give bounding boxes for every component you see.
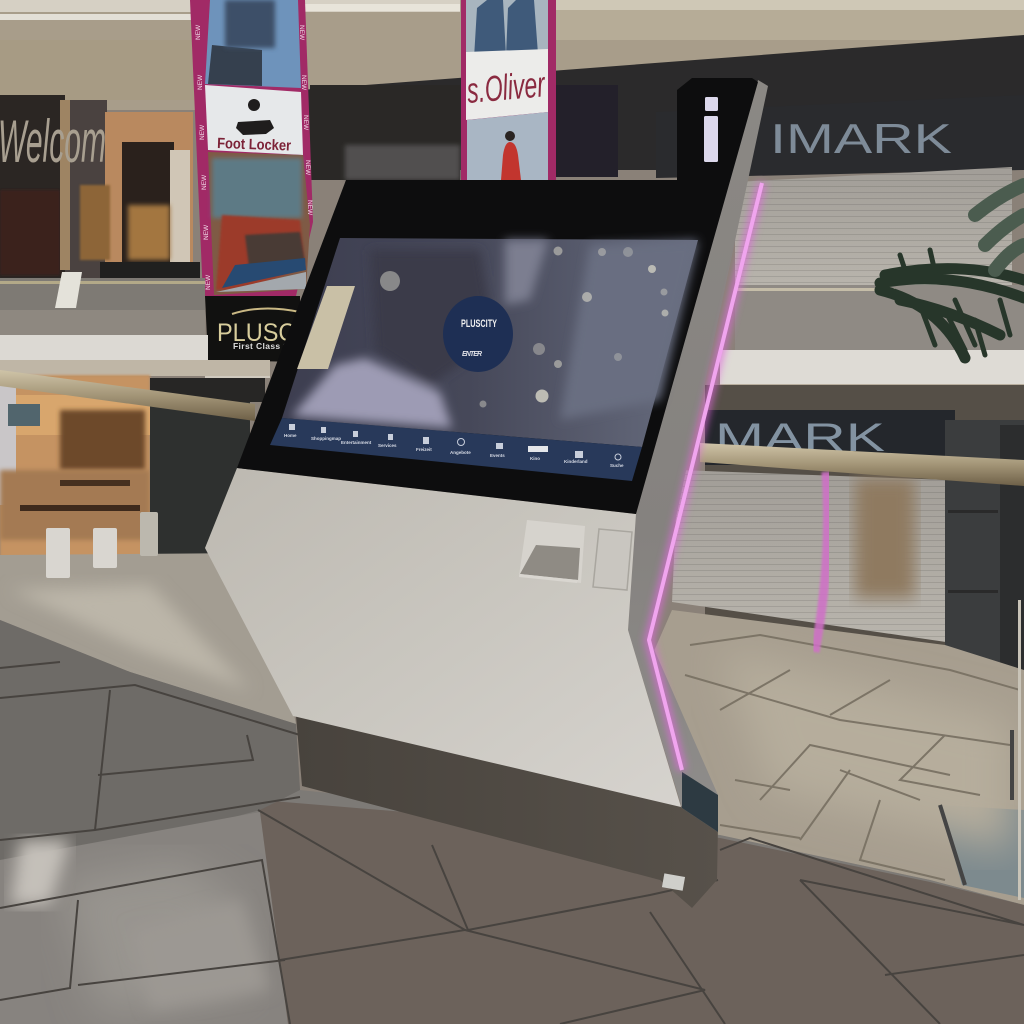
repeated NEW strip labels (195, 24, 313, 290)
repeated NEW strip labels: NEW (195, 24, 202, 40)
cafe planters (46, 512, 158, 578)
icon: referee figure (236, 99, 274, 135)
plant (880, 185, 1024, 358)
touch screen (270, 238, 698, 481)
sign: Primark upper: IMARK (770, 115, 952, 162)
kiosk black bezel and head (237, 78, 758, 514)
label plate on base (662, 873, 685, 891)
upper level right: PRIMARK store (656, 95, 1024, 351)
kiosk side panel (628, 80, 768, 832)
reflection: pink light on glass (815, 472, 828, 652)
repeated NEW strip labels: NEW (201, 174, 208, 190)
screen bokeh dots (380, 246, 668, 408)
pink LED strip (649, 183, 762, 770)
kiosk (205, 78, 768, 908)
label: enter: ENTER (462, 351, 482, 358)
floor inside glass left (0, 553, 296, 724)
repeated NEW strip labels: NEW (300, 75, 307, 91)
nav items: Suche (610, 463, 624, 468)
repeated NEW strip labels: NEW (302, 115, 309, 131)
promotional side card (297, 286, 355, 369)
navigation bar (270, 418, 642, 481)
upper walkway and white balustrades (0, 272, 1024, 414)
logo: PlusCity: PLUSCITY (461, 318, 497, 330)
granite floor left and right (0, 620, 1024, 1024)
card reader outline (593, 529, 632, 590)
upper level storefront: Welcome shop (0, 95, 200, 312)
nav items: Angebote (450, 450, 471, 455)
banner footer: PlusCity logo: PLUSCITY (217, 319, 332, 347)
upper level storefront: Welcome shop: Welcom (0, 108, 106, 175)
banner: Foot Locker (190, 0, 313, 296)
enter button with logo (443, 296, 513, 372)
kiosk front face (205, 468, 681, 807)
kiosk sign: small stand (55, 272, 82, 308)
info icon: illuminated i (704, 97, 718, 162)
nav items: Events (490, 453, 505, 458)
kiosk base (296, 716, 718, 908)
nav items: Shoppingmap (311, 436, 341, 441)
lower level right: PRIMARK store with shutter (672, 385, 1024, 670)
repeated NEW strip labels: NEW (298, 25, 305, 41)
lower level left: cafe (0, 375, 296, 724)
repeated NEW strip labels: NEW (203, 224, 210, 240)
handrails (0, 370, 1024, 486)
repeated NEW strip labels: NEW (197, 74, 204, 90)
nav items: Freizeit (416, 447, 432, 452)
card slot scanner (519, 520, 585, 583)
nav items: Services (378, 443, 397, 448)
banner footer: PlusCity logo: First Class Shopping (233, 341, 325, 351)
nav items (284, 433, 624, 468)
nav items: Kinderland (564, 459, 588, 464)
nav items: Entertainment (341, 440, 372, 445)
nav items: Kino (530, 456, 540, 461)
banner: s.Oliver (461, 0, 556, 180)
brand name: Foot Locker: Foot Locker (217, 135, 292, 155)
repeated NEW strip labels: NEW (199, 124, 206, 140)
brand name: s.Oliver: s.Oliver (465, 63, 548, 111)
tiled floor behind glass right (650, 472, 1024, 905)
repeated NEW strip labels: NEW (306, 200, 313, 216)
repeated NEW strip labels: NEW (205, 274, 212, 290)
nav icons (289, 424, 621, 460)
sign: Primark lower: MARK (715, 416, 885, 460)
screen image: person with headphones (292, 240, 698, 428)
repeated NEW strip labels: NEW (304, 160, 311, 176)
banner footer: PlusCity logo (205, 296, 332, 362)
nav items: Home (284, 433, 297, 438)
